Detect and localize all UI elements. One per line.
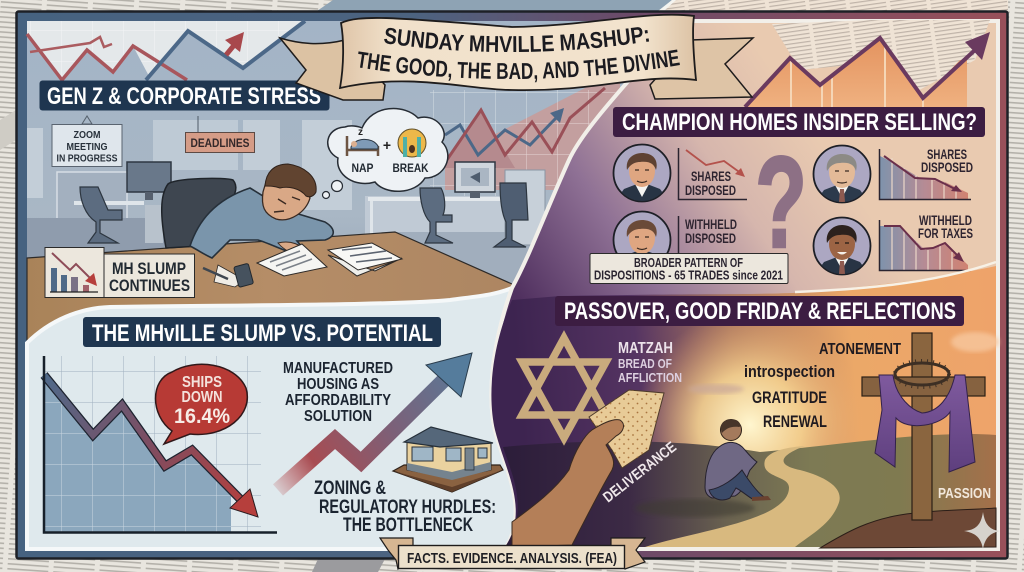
icon: manufactured house bbox=[393, 427, 503, 492]
callout: MH slump continues bbox=[45, 248, 194, 298]
text: manufactured housing as affordability solution: SOLUTION bbox=[304, 408, 372, 425]
desk bbox=[27, 232, 512, 345]
mini chart: shares disposed, bars: SHARES bbox=[927, 146, 967, 162]
sign: zoom meeting in progress: IN PROGRESS bbox=[56, 154, 118, 164]
closed eyes and mouth bbox=[274, 197, 300, 212]
face bbox=[262, 180, 310, 220]
office windows and partitions bbox=[27, 120, 620, 300]
sleeping worker bbox=[190, 164, 333, 258]
purple cloth bbox=[875, 375, 975, 472]
mini chart: shares disposed: SHARES bbox=[691, 168, 731, 184]
thought bubble: nap plus break: NAP bbox=[352, 161, 374, 175]
left desk, monitor and chair bbox=[74, 162, 171, 243]
reflection words: GRATITUDE bbox=[752, 388, 827, 407]
text: manufactured housing as affordability solution: AFFORDABILITY bbox=[285, 392, 391, 409]
right desks, monitor and chairs bbox=[368, 162, 528, 247]
potential up arrow bbox=[278, 353, 472, 490]
thought bubble: nap plus break: BREAK bbox=[392, 161, 429, 175]
foreground mound bbox=[820, 508, 996, 548]
mini chart: shares disposed, bars: DISPOSED bbox=[921, 159, 973, 175]
mini chart: withheld for taxes, bars: WITHHELD bbox=[919, 212, 972, 228]
mini chart: withheld disposed: WITHHELD bbox=[685, 216, 737, 232]
crown of thorns bbox=[895, 361, 949, 387]
callout: broader pattern of dispositions: BROADER PATTERN OF bbox=[634, 256, 743, 270]
callout: MH slump continues: CONTINUES bbox=[109, 276, 190, 295]
mini chart: withheld disposed: DISPOSED bbox=[685, 230, 736, 246]
mini chart: withheld for taxes, bars: FOR TAXES bbox=[918, 225, 973, 241]
sign: zoom meeting in progress: ZOOM bbox=[74, 130, 100, 141]
footer ribbon: facts evidence analysis bbox=[380, 538, 645, 569]
text: zoning and regulatory hurdles bbox=[314, 478, 496, 536]
background chart bbox=[27, 21, 305, 82]
title text: SUNDAY MHVILLE MASHUP: bbox=[384, 27, 650, 52]
panel: right side backdrop bbox=[491, 21, 998, 549]
text: matzah bread of affliction bbox=[618, 340, 682, 385]
right chart behind bubble bbox=[430, 70, 620, 200]
ribbon body bbox=[340, 15, 696, 90]
text: zoning and regulatory hurdles: THE BOTTLENECK bbox=[343, 515, 473, 536]
icon: crying face bbox=[398, 129, 426, 157]
speech bubble: ships down 16.4 percent bbox=[156, 364, 247, 444]
text: zoning and regulatory hurdles: ZONING & bbox=[314, 478, 386, 499]
icon: bed: z bbox=[358, 127, 363, 138]
hand bbox=[278, 242, 308, 256]
mini chart: withheld for taxes, bars bbox=[880, 212, 973, 270]
panel: the MHville slump vs potential bbox=[27, 288, 516, 549]
text: matzah bread of affliction: AFFLICTION bbox=[618, 370, 682, 385]
papers on desk bbox=[257, 243, 402, 276]
torso and arms bbox=[190, 188, 333, 258]
portrait: executive three bbox=[814, 146, 870, 204]
portrait: executive two bbox=[612, 210, 672, 253]
thought bubble: nap plus break bbox=[322, 109, 448, 198]
text: matzah bread of affliction: BREAD OF bbox=[618, 356, 672, 371]
footer ribbon: facts evidence analysis: FACTS. EVIDENCE. ANALYSIS. (FEA) bbox=[407, 550, 617, 567]
label: passion: PASSION bbox=[938, 485, 991, 502]
phone and pen bbox=[203, 263, 254, 287]
portrait: executive one bbox=[614, 144, 670, 203]
text: manufactured housing as affordability solution bbox=[283, 360, 393, 425]
reflection words: ATONEMENT bbox=[819, 341, 901, 358]
text: matzah bread of affliction: MATZAH bbox=[618, 340, 673, 357]
plus sign: + bbox=[383, 137, 391, 153]
speech bubble: ships down 16.4 percent: 16.4% bbox=[174, 405, 230, 428]
panel: Champion Homes insider selling bbox=[590, 20, 990, 284]
text: manufactured housing as affordability solution: MANUFACTURED bbox=[283, 360, 393, 377]
title text: THE GOOD, THE BAD, AND THE DIVINE bbox=[358, 50, 680, 82]
callout: MH slump continues: MH SLUMP bbox=[112, 259, 186, 278]
sign: zoom meeting in progress: MEETING bbox=[66, 142, 108, 153]
reflection words: introspection bbox=[744, 362, 835, 381]
arm and hand bbox=[512, 420, 623, 547]
panel: Passover, Good Friday and reflections bbox=[491, 262, 1000, 549]
label: deliverance: DELIVERANCE bbox=[600, 439, 680, 506]
sign: deadlines bbox=[186, 116, 254, 152]
heading: the MHville slump vs potential: THE MHvILLE SLUMP VS. POTENTIAL bbox=[92, 320, 433, 347]
seated figure bbox=[635, 420, 771, 517]
sign: deadlines: DEADLINES bbox=[190, 136, 250, 150]
callout: broader pattern of dispositions bbox=[590, 254, 788, 284]
sunset sky bbox=[491, 262, 999, 547]
speech bubble: ships down 16.4 percent: DOWN bbox=[182, 389, 222, 406]
ribbon left tail bbox=[280, 38, 385, 100]
text: manufactured housing as affordability solution: HOUSING AS bbox=[297, 376, 379, 393]
panel background bbox=[27, 288, 516, 549]
star of David bbox=[522, 338, 606, 438]
ribbon right tail bbox=[650, 38, 753, 99]
winding road bbox=[645, 446, 840, 547]
mini chart: withheld disposed bbox=[678, 216, 737, 256]
cross with purple cloth and crown of thorns bbox=[862, 333, 985, 520]
panel: Gen Z and corporate stress bbox=[27, 21, 687, 346]
title ribbon bbox=[278, 14, 755, 101]
mini chart: shares disposed, bars bbox=[880, 146, 973, 200]
callout: broader pattern of dispositions: DISPOSITIONS - 65 TRADES since 2021 bbox=[594, 268, 783, 282]
speech bubble: ships down 16.4 percent: SHIPS bbox=[182, 374, 222, 391]
icon: question mark: ? bbox=[755, 129, 807, 275]
sparkle bbox=[964, 512, 1000, 549]
matzah bbox=[589, 390, 664, 468]
mini chart: shares disposed bbox=[678, 148, 747, 200]
portrait: executive four bbox=[814, 218, 870, 276]
office wall bbox=[27, 21, 687, 346]
hand holding matzah bbox=[512, 390, 664, 547]
office chair bbox=[162, 178, 236, 248]
newspaper and rising chart bbox=[745, 20, 990, 107]
heading: Gen Z and corporate stress: GEN Z & CORPORATE STRESS bbox=[47, 83, 321, 110]
sign: zoom meeting in progress bbox=[52, 116, 122, 166]
reflection words bbox=[744, 341, 901, 431]
title text bbox=[358, 27, 680, 82]
slump line chart bbox=[44, 356, 277, 532]
hair bbox=[265, 164, 316, 197]
text: zoning and regulatory hurdles: REGULATORY HURDLES: bbox=[319, 497, 496, 518]
reflection words: RENEWAL bbox=[763, 412, 827, 431]
mini chart: shares disposed: DISPOSED bbox=[685, 182, 736, 198]
hills bbox=[503, 434, 996, 547]
